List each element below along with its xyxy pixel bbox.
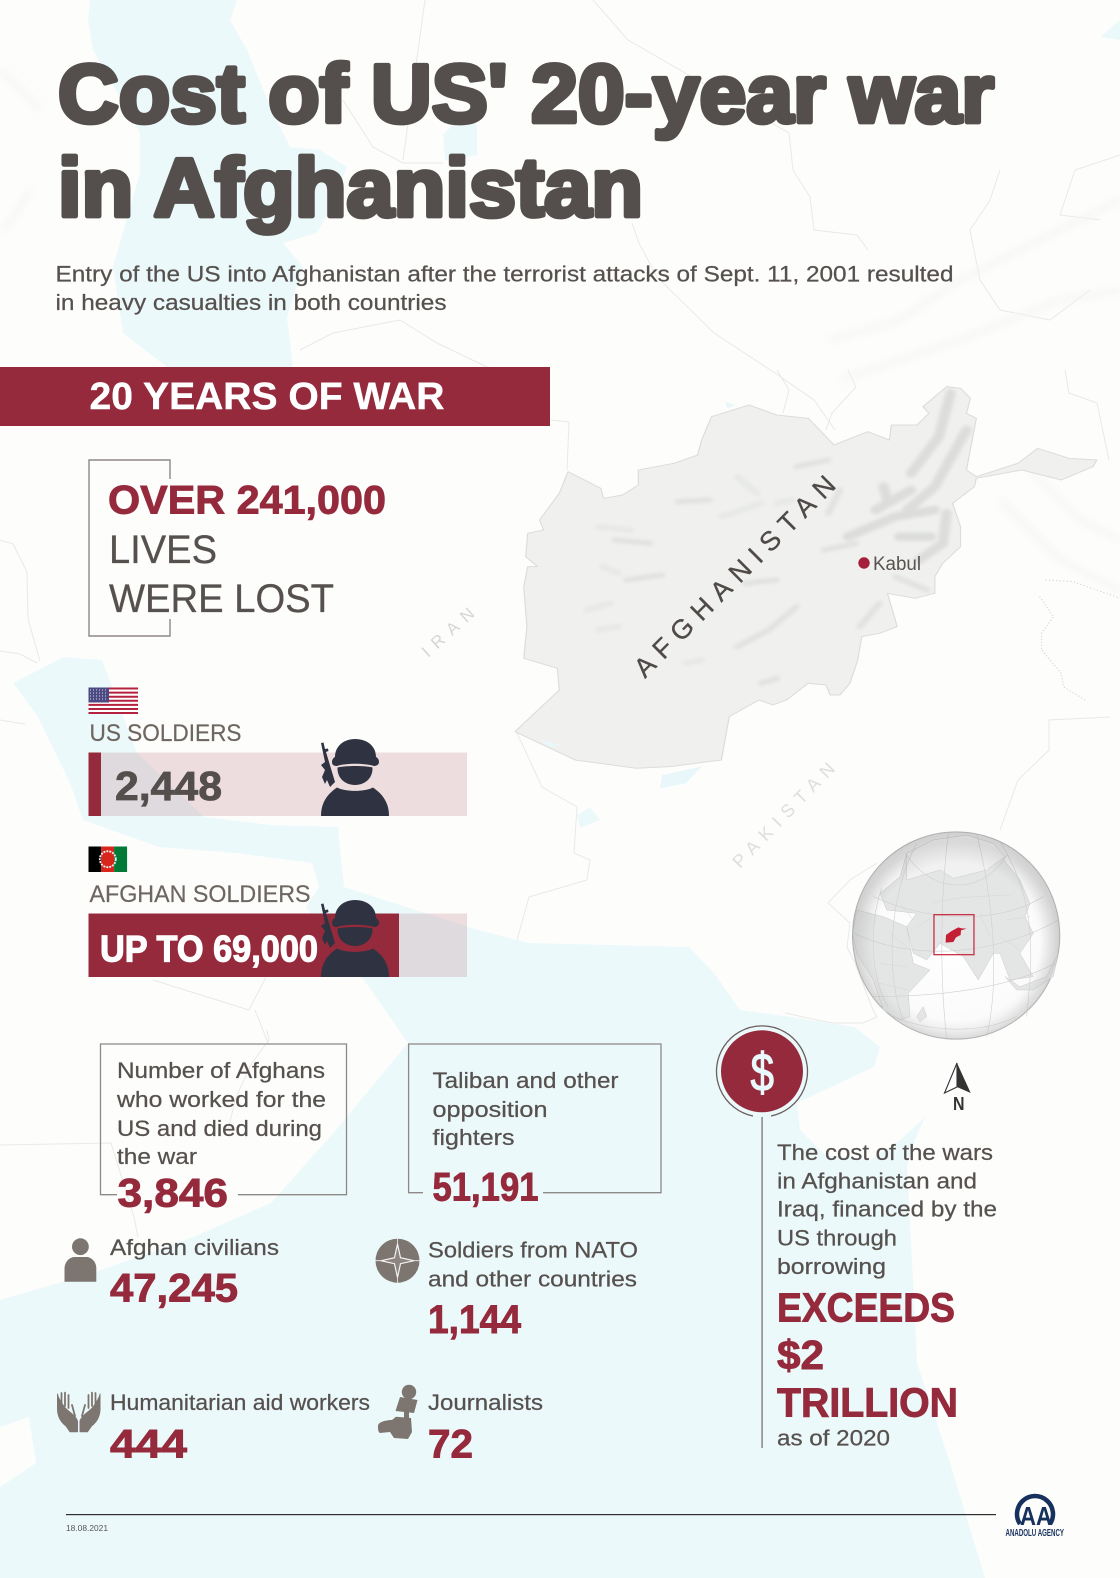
title: Cost of US' 20-year war [58, 47, 994, 140]
description: the war [117, 1144, 197, 1169]
description: who worked for the [116, 1087, 326, 1112]
text: lives were lost [109, 528, 334, 621]
faint relief [0, 70, 1120, 590]
stat: Afghan civilians [64, 1235, 279, 1310]
text: lives were lost: WERE LOST [109, 577, 334, 621]
bracket frame [89, 460, 170, 636]
panel: Afghans who worked for the US [100, 1044, 346, 1216]
water: Caspian Sea [88, 0, 347, 367]
terrain shading [587, 393, 966, 683]
panel: Afghan soldiers [88, 846, 467, 977]
headline: exceeds $2 trillion [777, 1284, 958, 1426]
headline: exceeds $2 trillion: TRILLION [777, 1380, 958, 1426]
map label: AFGHANISTAN: AFGHANISTAN [628, 470, 842, 683]
panel: US soldiers [88, 688, 467, 816]
panel: lives lost [89, 460, 386, 636]
title [58, 47, 994, 234]
description: Iraq, financed by the [777, 1196, 997, 1222]
value: 444: 444 [110, 1422, 188, 1466]
value: 1,144: 1,144 [428, 1298, 522, 1342]
icon: dollar badge: $ [750, 1043, 774, 1103]
headline: over 241,000: OVER 241,000 [108, 478, 386, 522]
logo: Anadolu Agency: AA [1020, 1501, 1052, 1531]
title: in Afghanistan [58, 141, 643, 234]
bar: US soldiers [88, 752, 467, 816]
stat: Humanitarian aid workers [58, 1390, 370, 1466]
water: Persian Gulf and Arabian Sea [0, 657, 985, 1578]
value: up to 69,000: UP TO 69,000 [100, 928, 318, 970]
label: Journalists [428, 1390, 543, 1415]
icon: soldier [321, 739, 389, 816]
description: borrowing [777, 1254, 886, 1279]
headline: exceeds $2 trillion: $2 [777, 1332, 824, 1378]
icon: north arrow [944, 1063, 971, 1114]
description: in Afghanistan and [777, 1168, 977, 1194]
map: Afghanistan [515, 387, 1120, 788]
locator globe [852, 832, 1060, 1039]
icon: Afghan flag [88, 846, 127, 872]
Afghanistan country shape [515, 387, 1097, 768]
headline: exceeds $2 trillion: EXCEEDS [777, 1284, 955, 1330]
subtitle: in heavy casualties in both countries [56, 290, 446, 315]
note: as of 2020: as of 2020 [777, 1426, 890, 1450]
icon: NATO compass star [376, 1239, 420, 1283]
water: Aral Sea [443, 117, 477, 160]
description [432, 1068, 618, 1150]
frame [409, 1044, 661, 1193]
stat: Journalists [378, 1385, 543, 1466]
label: Afghan soldiers: AFGHAN SOLDIERS [90, 881, 310, 908]
stat: NATO soldiers [376, 1238, 638, 1342]
icon: open hands [58, 1393, 100, 1432]
label: Soldiers from NATO [428, 1238, 638, 1262]
text: lives were lost: LIVES [109, 528, 217, 572]
icon: US flag [88, 688, 138, 714]
map label: PAKISTAN: PAKISTAN [728, 759, 839, 872]
connector line [761, 1117, 763, 1448]
value: 51,191: 51,191 [432, 1166, 538, 1210]
globe landmasses [853, 835, 1058, 1022]
description: fighters [432, 1125, 514, 1150]
description: The cost of the wars [777, 1140, 993, 1165]
logo: Anadolu Agency: ANADOLU AGENCY [1006, 1527, 1064, 1539]
label [428, 1238, 638, 1292]
map label: IRAN: IRAN [418, 604, 478, 661]
description: US through [777, 1226, 897, 1250]
country borders [0, 0, 1120, 1237]
description [777, 1140, 997, 1279]
subtitle: Entry of the US into Afghanistan after the terrorist attacks of Sept. 11, 2001 resulted [56, 262, 954, 286]
panel: Taliban and other opposition fighters [409, 1044, 661, 1210]
description: US and died during [117, 1116, 322, 1141]
icon: north arrow: N [953, 1094, 964, 1114]
icon: soldier [321, 900, 389, 977]
description: Taliban and other [432, 1068, 618, 1093]
logo: Anadolu Agency [1006, 1496, 1064, 1539]
value: 2,448: 2,448 [115, 763, 222, 809]
panel: cost of the wars [777, 1140, 997, 1450]
lakes and dotted border [542, 402, 735, 788]
value: 72: 72 [428, 1422, 473, 1466]
subtitle [56, 262, 954, 315]
water: small lakes [577, 20, 1120, 828]
globe shading [852, 832, 1060, 1039]
globe graticule [854, 833, 1058, 1038]
highlight box [934, 915, 974, 955]
footer rule [66, 1514, 996, 1515]
description: Number of Afghans [117, 1058, 325, 1083]
banner: 20 years of war [0, 367, 550, 426]
value: 3,846: 3,846 [118, 1172, 228, 1216]
label: Afghan civilians [110, 1235, 279, 1260]
icon: dollar badge [716, 1026, 808, 1448]
icon: person [64, 1238, 96, 1282]
map marker: Kabul: Kabul [873, 554, 921, 575]
Afghanistan highlight [946, 927, 967, 943]
label: Humanitarian aid workers [110, 1390, 370, 1415]
banner: 20 years of war: 20 YEARS OF WAR [90, 376, 444, 418]
value: 47,245: 47,245 [110, 1266, 238, 1310]
label: US soldiers: US SOLDIERS [90, 720, 242, 747]
description [116, 1058, 326, 1169]
bar: Afghan soldiers [88, 914, 467, 977]
icon: microphone in hand [378, 1385, 418, 1439]
label: and other countries [428, 1266, 637, 1292]
date: 18.08.2021 [66, 1523, 108, 1533]
description: opposition [432, 1097, 548, 1122]
frame [100, 1044, 346, 1195]
